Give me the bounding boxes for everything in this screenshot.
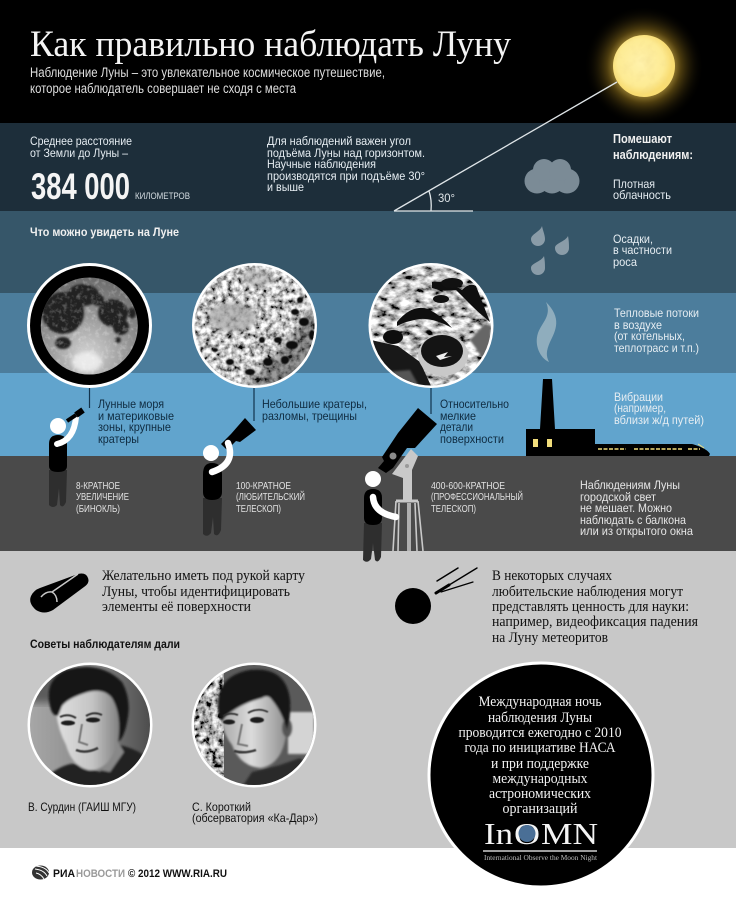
background: dark slate band [0,123,736,211]
text: map advice: Желательно иметь под рукой карту [102,568,305,584]
text: city light note [580,478,693,538]
magnification label 1: УВЕЛИЧЕНИЕ [76,492,129,503]
icon: meteor with streaks [395,568,477,624]
angle explanation text: Научные наблюдения [267,157,376,171]
text: vibration: Вибрации [614,390,663,404]
caption: fine details: мелкие [440,409,476,423]
heading: obstacles: Помешают [613,132,672,146]
background: dark grey ground band [0,456,736,551]
caption: seas: зоны, крупные [98,420,171,434]
text: vibration: (например, [614,401,666,415]
icon: high-speed train [595,444,710,456]
caption: seas [98,397,174,446]
caption: fine details: поверхности [440,432,504,446]
caption: seas: и материковые [98,409,174,423]
figure: observer with amateur telescope [203,418,256,536]
text: meteorite note: представлять ценность для науки: [492,599,689,615]
text: meteorite note: на Луну метеоритов [492,630,608,646]
callout: International Observe the Moon Night [429,663,653,887]
background: light blue band [0,373,736,456]
caption: fine details [440,397,509,446]
text: precipitation [613,232,672,269]
big number: 384 000 [31,166,130,207]
text: city light note: городской свет [580,490,656,504]
distance text: от Земли до Луны – [30,146,128,160]
text: city light note: или из открытого окна [580,524,693,538]
text: dense cloud [613,177,671,202]
caption: fine details: детали [440,420,473,434]
angle explanation text: подъёма Луны над горизонтом. [267,146,425,160]
caption: small craters: разломы, трещины [262,409,357,423]
icon: cloud [524,159,580,194]
text: map advice: Луны, чтобы идентифицировать [102,584,290,600]
name: Korotky: (обсерватория «Ка-Дар») [192,811,318,825]
logo: InOMN: International Observe the Moon Night [484,854,597,862]
callout: International Observe the Moon Night: и при поддержке [491,756,589,772]
magnification label 2: 100-КРАТНОЕ [236,481,291,492]
magnification label 1: 8-КРАТНОЕ [76,481,120,492]
text: meteorite note: например, видеофиксация падения [492,614,698,630]
magnification label 2: (ЛЮБИТЕЛЬСКИЙ [236,490,305,503]
footer: RIA Novosti logo and copyright: © 2012 WWW.RIA.RU [128,868,227,880]
text: precipitation: Осадки, [613,232,653,246]
angle diagram: line of sight with 30 degree angle [394,82,617,211]
subtitle: Наблюдение Луны – это увлекательное космическое путешествие, [30,65,385,80]
caption: fine details: Относительно [440,397,509,411]
magnification label 3 [431,481,523,515]
caption: small craters [262,397,367,423]
portrait: V. Surdin [27,662,153,790]
footer: RIA Novosti logo and copyright [32,866,227,880]
logo: InOMN: O [514,816,540,851]
figure: observer with binoculars [49,410,83,507]
icon: heat haze [537,302,556,362]
heading: obstacles: наблюдениям: [613,148,693,162]
text: heat flows: Тепловые потоки [614,306,699,320]
name: Korotky [192,800,318,825]
footer: RIA Novosti logo and copyright: РИА [53,868,75,880]
subtitle [30,65,385,96]
subtitle: которое наблюдатель совершает не сходя с места [30,81,296,96]
callout: International Observe the Moon Night: года по инициативе НАСА [464,740,616,756]
magnification label 2 [236,481,305,515]
portrait: S. Korotky [192,662,316,790]
moon view 3: detailed surface through professional telescope [368,263,494,388]
text: meteorite note: любительские наблюдения могут [492,584,683,600]
text: meteorite note: В некоторых случаях [492,568,612,584]
angle diagram: line of sight with 30 degree angle: 30° [438,193,455,205]
callout: International Observe the Moon Night: Международная ночь [478,694,602,710]
logo: InOMN [483,816,598,862]
telescope mount and tripod [392,449,423,551]
text: vibration: вблизи ж/д путей) [614,413,704,427]
icon: rain drops [531,226,569,275]
text: city light note: наблюдать с балкона [580,513,686,527]
caption: seas: Лунные моря [98,397,164,411]
angle explanation text: Для наблюдений важен угол [267,134,411,148]
distance text: КИЛОМЕТРОВ [135,191,190,202]
text: meteorite note [492,568,698,646]
angle explanation text [267,134,425,194]
name: Surdin: В. Сурдин (ГАИШ МГУ) [28,800,136,814]
magnification label 3: 400-600-КРАТНОЕ [431,481,505,492]
text: vibration [614,390,704,427]
text: heat flows: теплотрасс и т.п.) [614,341,699,355]
heading: obstacles [613,132,693,162]
background: black sky band [0,0,736,123]
text: dense cloud: Плотная [613,177,655,191]
background: mid blue band [0,293,736,373]
callout: International Observe the Moon Night: наблюдения Луны [488,710,592,726]
callout: International Observe the Moon Night: астрономических [489,786,591,802]
text: precipitation: роса [613,255,637,269]
background: white footer band [0,848,736,907]
magnification label 1: (БИНОКЛЬ) [76,504,120,515]
callout: International Observe the Moon Night: международных [492,771,588,787]
moon view 1: whole moon in binoculars [27,263,152,388]
background: slate blue band [0,211,736,293]
icon: factory with chimney [526,379,595,456]
text: dense cloud: облачность [613,188,671,202]
footer: RIA Novosti logo and copyright: НОВОСТИ [76,868,125,880]
distance text: Среднее расстояние [30,134,132,148]
text: map advice [102,568,305,615]
title: Как правильно наблюдать Луну [30,24,511,65]
text: city light note: не мешает. Можно [580,501,672,515]
background: light grey band [0,551,736,848]
text: precipitation: в частности [613,243,672,257]
moon view 2: craters through amateur telescope [192,263,317,388]
magnification label 1 [76,481,129,515]
icon: glowing full moon [592,14,696,118]
magnification label 3: ТЕЛЕСКОП) [431,504,476,515]
angle explanation text: производятся при подъёме 30° [267,169,425,183]
text: city light note: Наблюдениям Луны [580,478,680,492]
icon: RIA globe [32,866,49,880]
text: heat flows [614,306,699,355]
text: heat flows: (от котельных, [614,329,685,343]
magnification label 3: (ПРОФЕССИОНАЛЬНЫЙ [431,490,523,503]
angle explanation text: и выше [267,180,304,194]
callout: International Observe the Moon Night: проводится ежегодно с 2010 [458,725,622,741]
text: heat flows: в воздухе [614,318,662,332]
distance text [30,134,190,207]
connector lines from moons to observers [90,388,431,421]
caption: seas: кратеры [98,432,139,446]
logo: InOMN: In [484,816,514,851]
heading: what can be seen: Что можно увидеть на Луне [30,225,179,239]
heading: advisers: Советы наблюдателям дали [30,637,180,651]
callout: International Observe the Moon Night: организаций [502,801,578,817]
figure: observer with professional telescope [363,408,437,562]
caption: small craters: Небольшие кратеры, [262,397,367,411]
logo: InOMN: MN [541,816,598,851]
text: map advice: элементы её поверхности [102,599,251,615]
name: Korotky: С. Короткий [192,800,251,814]
icon: rolled map [30,574,89,612]
magnification label 2: ТЕЛЕСКОП) [236,504,281,515]
